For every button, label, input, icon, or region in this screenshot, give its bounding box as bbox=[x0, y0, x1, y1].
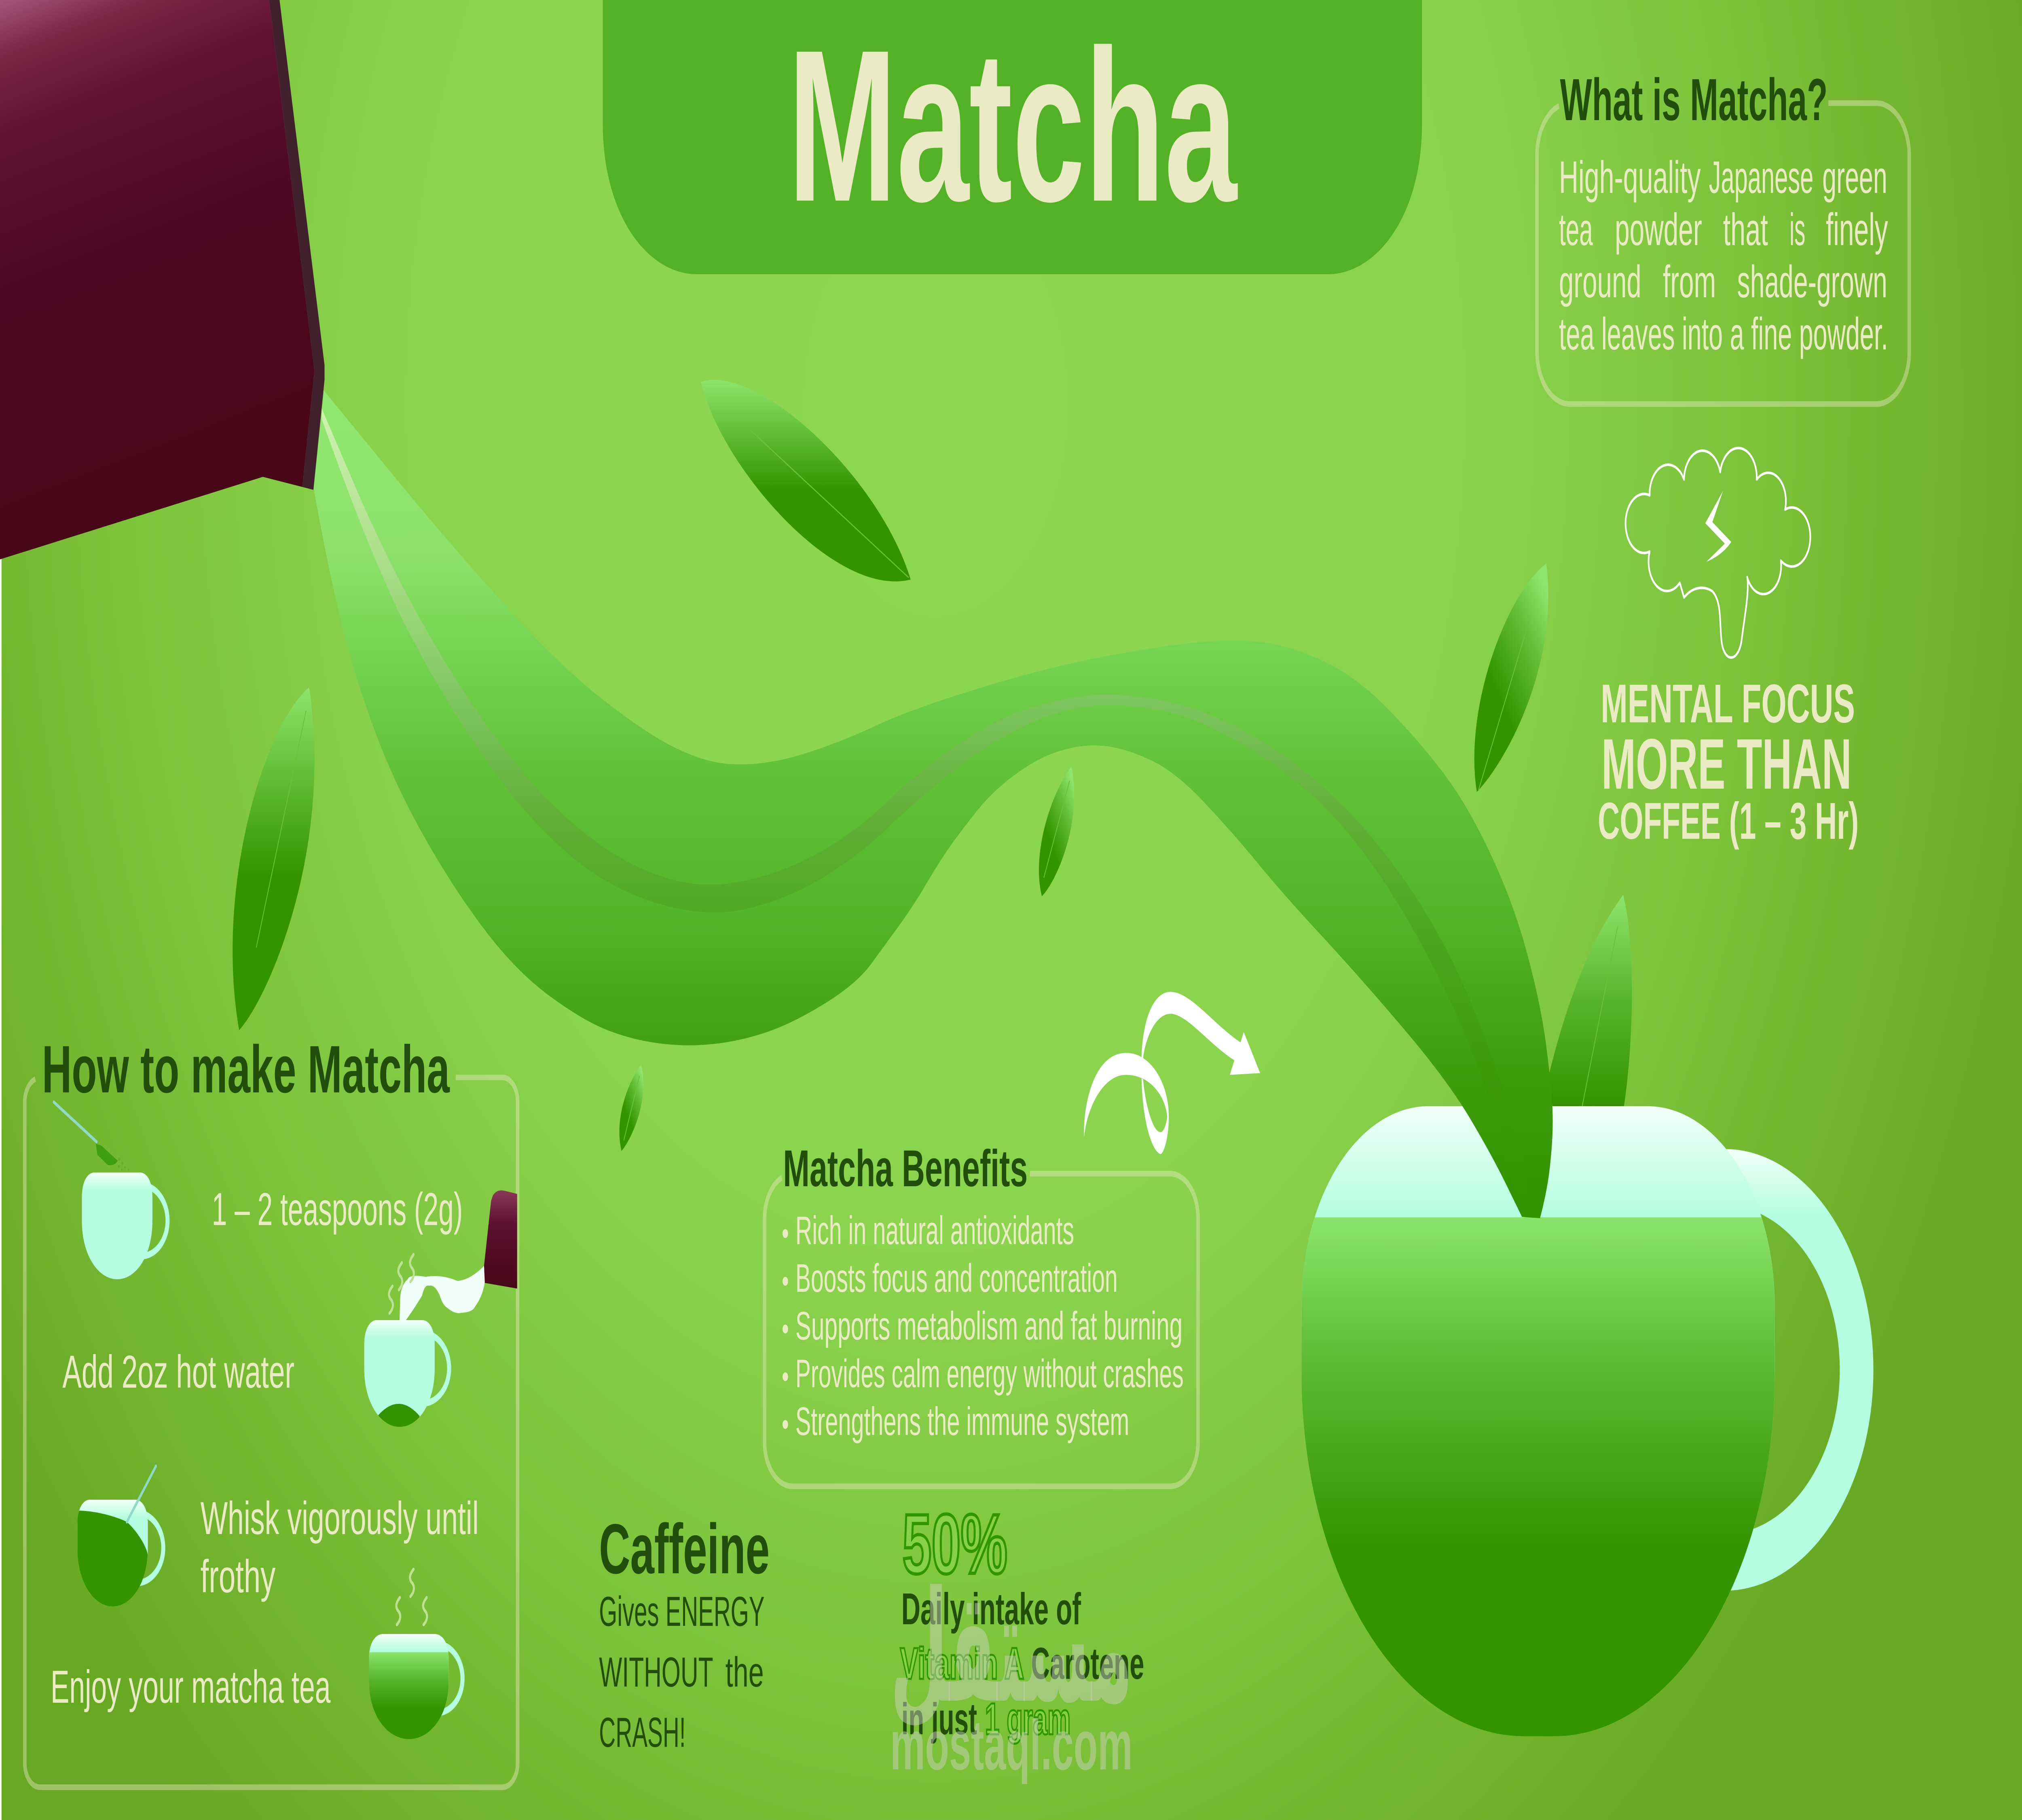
step 4 steam bbox=[396, 1569, 427, 1625]
paragraph: green bbox=[1822, 152, 1887, 203]
caffeine text bbox=[599, 1588, 765, 1756]
paragraph: tea bbox=[1559, 204, 1593, 255]
paragraph: ground bbox=[1559, 256, 1641, 307]
step 2 steam bbox=[389, 1255, 414, 1313]
big matcha cup bbox=[1289, 1106, 1873, 1743]
cup handle bbox=[1576, 1149, 1873, 1591]
heading: Matcha Benefits bbox=[783, 1139, 1028, 1198]
caffeine block bbox=[599, 1509, 770, 1756]
arrow bbox=[1084, 992, 1260, 1154]
stat: 50%: 50% bbox=[902, 1497, 1007, 1592]
step 1 text: 1 – 2 teaspoons (2g) bbox=[212, 1184, 463, 1235]
pot spout rim bbox=[269, 0, 324, 490]
paragraph: from bbox=[1663, 256, 1716, 307]
step 3 text: frothy bbox=[201, 1551, 276, 1602]
step 4: full cup bbox=[369, 1634, 463, 1740]
matcha liquid bbox=[1289, 1217, 1784, 1743]
step 4 text: Enjoy your matcha tea bbox=[51, 1661, 331, 1713]
step 3: cup with whisk bbox=[77, 1466, 163, 1609]
caffeine text: the bbox=[725, 1649, 764, 1696]
stat text: Daily intake of bbox=[901, 1585, 1081, 1634]
title banner bbox=[603, 0, 1422, 274]
mental focus callout bbox=[1598, 673, 1859, 850]
panel: how to make matcha bbox=[25, 1032, 518, 1787]
panel outline bbox=[765, 1174, 1198, 1486]
heading: How to make Matcha bbox=[42, 1032, 450, 1107]
benefits list: Supports metabolism and fat burning bbox=[795, 1304, 1182, 1348]
benefits list: Rich in natural antioxidants bbox=[795, 1208, 1074, 1253]
vitamin stat block: Vitamin A bbox=[900, 1639, 1024, 1689]
paragraph: Japanese bbox=[1709, 152, 1813, 203]
paragraph: tea leaves into a fine powder. bbox=[1559, 308, 1888, 359]
title: Matcha bbox=[788, 5, 1238, 247]
stream highlight vein bbox=[322, 408, 1532, 1217]
spoon bbox=[54, 1102, 129, 1171]
vitamin stat block: in just bbox=[901, 1695, 977, 1744]
vitamin stat block: 1 gram bbox=[985, 1695, 1071, 1744]
benefits list: Strengthens the immune system bbox=[795, 1399, 1129, 1444]
cup body bbox=[1301, 1106, 1775, 1736]
mental focus callout: MENTAL FOCUS bbox=[1601, 673, 1855, 734]
step 2: small pot pouring bbox=[400, 1190, 517, 1320]
big pot bbox=[0, 0, 324, 559]
leaf: left bbox=[233, 687, 315, 1030]
leaf: behind cup bbox=[1542, 895, 1632, 1106]
caffeine text: CRASH! bbox=[599, 1709, 686, 1756]
step 2 text: Add 2oz hot water bbox=[62, 1346, 294, 1398]
benefits list: Boosts focus and concentration bbox=[795, 1256, 1118, 1301]
vitamin stat block bbox=[900, 1497, 1144, 1744]
matcha stream poured from pot bbox=[314, 391, 1553, 1218]
icon: lightning bolt bbox=[1705, 491, 1731, 562]
paragraph bbox=[1559, 152, 1888, 359]
watermark bbox=[890, 1558, 1133, 1784]
panel: matcha benefits bbox=[765, 1139, 1198, 1486]
leaf: small lower bbox=[620, 1064, 643, 1151]
paragraph: is bbox=[1789, 204, 1805, 255]
watermark: mostaql.com bbox=[890, 1706, 1133, 1784]
step 1: cup with spoon bbox=[54, 1102, 167, 1279]
leaf: small centre bbox=[1039, 766, 1074, 896]
step 3 text bbox=[201, 1493, 479, 1602]
benefits list: Provides calm energy without crashes bbox=[795, 1352, 1184, 1396]
vitamin stat block: Carotene bbox=[1031, 1639, 1144, 1689]
caffeine heading: Caffeine bbox=[599, 1509, 770, 1588]
hot water stream bbox=[400, 1266, 485, 1320]
leaf: upper right bbox=[1474, 563, 1548, 792]
step 3 text: Whisk vigorously until bbox=[201, 1493, 479, 1544]
caffeine text: Gives ENERGY bbox=[599, 1588, 765, 1635]
paragraph: powder bbox=[1615, 204, 1702, 255]
panel outline bbox=[25, 1077, 518, 1787]
paragraph: that bbox=[1723, 204, 1768, 255]
watermark: مستقل bbox=[890, 1558, 1133, 1737]
paragraph: High-quality bbox=[1559, 152, 1701, 203]
heading: What is Matcha? bbox=[1560, 66, 1827, 133]
step 2: cup bbox=[364, 1320, 449, 1429]
panel: what is matcha bbox=[1537, 66, 1909, 404]
mental focus callout: COFFEE (1 – 3 Hr) bbox=[1598, 792, 1859, 850]
icon: brain with lightning bolt bbox=[1626, 448, 1810, 658]
benefits list bbox=[783, 1208, 1184, 1444]
caffeine text: WITHOUT bbox=[599, 1649, 713, 1696]
leaf: upper centre bbox=[701, 380, 911, 582]
paragraph: shade-grown bbox=[1737, 256, 1887, 307]
panel outline bbox=[1537, 103, 1909, 404]
mental focus callout: MORE THAN bbox=[1601, 724, 1852, 804]
paragraph: finely bbox=[1826, 204, 1888, 255]
